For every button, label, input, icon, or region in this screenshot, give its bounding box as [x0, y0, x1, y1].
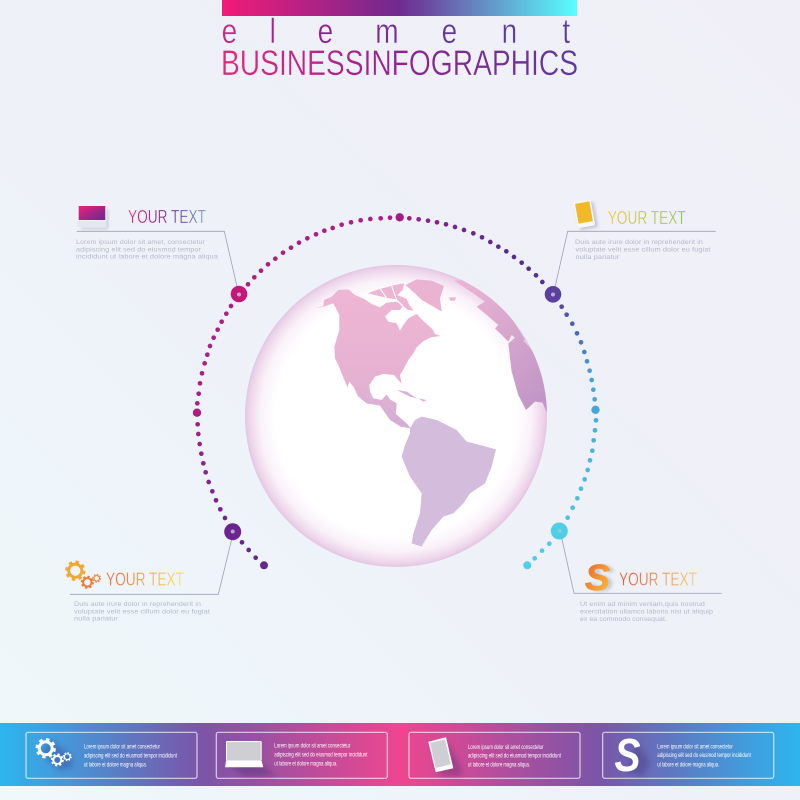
body text: adipiscing elit sed do eiusmod tempor — [76, 246, 202, 253]
card border — [603, 732, 774, 778]
card text: ut labore et dolore magna aliqua. — [274, 762, 338, 768]
card text — [468, 745, 561, 769]
greenland — [406, 279, 456, 312]
icon: laptop — [78, 204, 108, 229]
heading: YOUR TEXT — [608, 208, 686, 228]
leader line — [555, 231, 716, 287]
top gradient bar — [222, 0, 577, 16]
arc end point: bottom left — [260, 561, 268, 569]
arctic islands — [366, 283, 415, 312]
body text: voluptate velit esse cillum dolor eu fugiat — [74, 608, 210, 615]
card border — [216, 732, 387, 778]
card text: adipiscing elit sed do eiusmod tempor incididunt — [84, 754, 177, 760]
bottom band — [0, 723, 800, 786]
body text: voluptate velit esse cillum dolor eu fugiat — [576, 246, 711, 254]
body text — [76, 239, 218, 261]
card: smartphone — [409, 732, 580, 778]
body text: incididunt ut labore et dolore magna aliqua — [76, 254, 218, 261]
callout: bottom right — [551, 522, 722, 623]
heading: YOUR TEXT — [106, 569, 184, 589]
card text: adipiscing elit sed do eiusmod tempor incididunt — [657, 753, 751, 759]
callout: top right — [545, 199, 716, 303]
card border — [409, 732, 580, 778]
africa — [508, 338, 547, 412]
body text: Duis aute irure dolor in reprehenderit in — [575, 239, 703, 246]
arc end point: left — [193, 408, 201, 417]
dotted arc: right upper — [407, 216, 597, 402]
icon: dollar: S — [614, 729, 641, 781]
card text: ut labore et dolore magna aliqua. — [657, 762, 720, 768]
body text: exercitation ullamco laboris nisi ut aliquip — [580, 608, 713, 616]
globe sphere — [245, 265, 547, 567]
card text: Lorem ipsum dolor sit amet consectetur — [274, 744, 350, 750]
body text: Lorem ipsum dolor sit amet, consectetur — [76, 239, 206, 246]
caribbean islands — [397, 390, 427, 402]
title: business infographics: BUSINESSINFOGRAPHICS — [221, 44, 578, 83]
icon: smartphone — [573, 199, 598, 230]
card: dollar — [603, 729, 774, 781]
card: laptop — [216, 732, 387, 778]
icon: smartphone — [428, 737, 462, 776]
card text: Lorem ipsum dolor sit amet consectetur — [84, 744, 160, 750]
icon: gears — [66, 562, 101, 588]
body text: Duis aute irure dolor in reprehenderit in — [74, 601, 201, 608]
icon: dollar s: S — [590, 558, 614, 599]
europe — [454, 280, 525, 342]
icon: laptop — [225, 741, 276, 776]
icon: gears — [37, 739, 72, 770]
north and central america — [314, 289, 441, 428]
callout: bottom left — [66, 523, 241, 623]
card text — [657, 744, 751, 768]
heading: YOUR TEXT — [128, 207, 206, 227]
card: gears — [26, 732, 197, 778]
body text: nulla pariatur — [576, 254, 620, 261]
node — [545, 286, 561, 303]
body text: Ut enim ad minim veniam,quis nostrud — [580, 601, 705, 608]
node — [231, 286, 247, 302]
icon: dollar s: S — [585, 557, 610, 598]
dotted arc: left upper — [195, 215, 392, 406]
continents — [314, 279, 550, 547]
card text: Lorem ipsum dolor sit amet consectetur — [468, 745, 544, 751]
card text: adipiscing elit sed do eiusmod tempor incididunt — [274, 752, 368, 758]
leader line — [562, 538, 722, 593]
card text: adipiscing elit sed do eiusmod tempor incididunt — [468, 754, 561, 760]
header — [221, 0, 578, 83]
arc end point: bottom right — [523, 561, 531, 569]
heading: YOUR TEXT — [619, 569, 697, 589]
arc end point: top — [396, 213, 404, 222]
card text: Lorem ipsum dolor sit amet consectetur — [657, 744, 733, 750]
south america — [402, 417, 496, 547]
callout: top left — [76, 204, 247, 302]
card text: ut labore et dolore magna aliqua. — [468, 763, 530, 769]
band background — [0, 723, 800, 786]
body text — [74, 601, 210, 623]
card text — [274, 744, 368, 768]
body text — [580, 601, 713, 623]
subtitle: element: element — [222, 11, 570, 51]
body text — [575, 239, 711, 261]
dotted arc: right lower — [532, 418, 598, 561]
card text: ut labore et dolore magna aliqua. — [84, 762, 147, 768]
dotted arc: left lower — [195, 422, 258, 560]
card text — [84, 744, 177, 768]
card border — [26, 732, 197, 778]
body text: nulla pariatur — [74, 616, 119, 623]
body text: ex ea commodo consequat. — [580, 616, 667, 623]
leader line — [70, 538, 232, 594]
node — [224, 523, 241, 540]
node — [551, 522, 568, 540]
globe — [245, 265, 550, 567]
arc end point: right — [591, 406, 600, 414]
leader line — [77, 231, 238, 293]
